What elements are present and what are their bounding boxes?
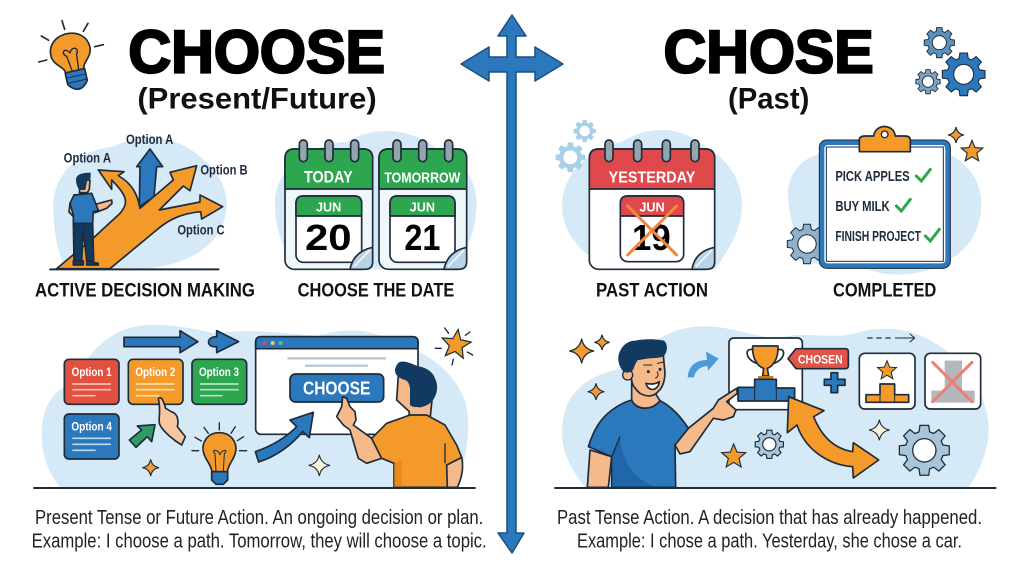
option cards: Option 1 bbox=[72, 365, 112, 379]
illustration: yesterday calendar: YESTERDAY bbox=[609, 170, 696, 187]
browser window: CHOOSE bbox=[303, 378, 370, 399]
curved arrow bbox=[688, 352, 719, 377]
hand pointing at option 2 bbox=[158, 398, 185, 445]
option labels: Option A bbox=[126, 132, 173, 147]
panel: chose top section bbox=[556, 19, 985, 302]
illustration: active decision making: Option A bbox=[64, 150, 111, 165]
large orange arrow bbox=[787, 397, 879, 478]
person pointing bbox=[587, 339, 737, 487]
calendar tomorrow bbox=[379, 140, 467, 269]
label: active decision making: ACTIVE DECISION MAKING bbox=[35, 281, 255, 302]
calendar tomorrow: 21 bbox=[404, 217, 440, 258]
star bbox=[435, 327, 473, 365]
calendar today: 20 bbox=[305, 217, 352, 258]
sparkles bbox=[569, 335, 610, 400]
panel: chose bottom illustration bbox=[554, 327, 996, 552]
dashed arrow bbox=[867, 336, 892, 340]
illustration: completed clipboard: FINISH PROJECT bbox=[835, 229, 921, 245]
chosen tag bbox=[788, 349, 848, 369]
top arrows bbox=[124, 331, 239, 353]
person clicking choose bbox=[337, 362, 463, 487]
calendar today: JUN bbox=[316, 201, 341, 215]
label: completed: COMPLETED bbox=[833, 281, 936, 302]
description: chose bbox=[557, 507, 982, 552]
rejected podium card bbox=[925, 353, 981, 409]
illustration: yesterday calendar bbox=[556, 120, 742, 269]
sparkles bbox=[142, 455, 330, 476]
label: past action: PAST ACTION bbox=[596, 281, 708, 302]
option cards bbox=[64, 359, 247, 459]
chosen tag: CHOSEN bbox=[798, 352, 843, 366]
illustration: yesterday calendar: 19 bbox=[632, 217, 671, 258]
calendar tomorrow: TOMORROW bbox=[384, 170, 461, 187]
illustration: active decision making: Option B bbox=[200, 163, 248, 178]
background blob bbox=[562, 327, 989, 487]
illustration: active decision making bbox=[49, 132, 248, 269]
illustration: yesterday calendar: JUN bbox=[639, 201, 665, 215]
option cards: Option 2 bbox=[135, 365, 175, 379]
subtitle: present/future: (Present/Future) bbox=[137, 82, 377, 115]
icon: gears bbox=[916, 28, 985, 96]
calendar today bbox=[285, 140, 373, 269]
illustration: calendars today and tomorrow bbox=[275, 131, 477, 269]
description: choose: Present Tense or Future Action. An ongoing decision or plan. bbox=[35, 507, 483, 529]
small sparkle, star and gears bbox=[722, 420, 949, 475]
star podium card bbox=[859, 353, 915, 409]
illustration: completed clipboard: BUY MILK bbox=[835, 199, 890, 215]
description: choose: Example: I choose a path. Tomorrow, they will choose a topic. bbox=[32, 530, 487, 552]
illustration: active decision making: Option C bbox=[177, 222, 225, 237]
option cards: Option 3 bbox=[199, 365, 239, 379]
option cards: Option 4 bbox=[71, 419, 112, 433]
calendar today: TODAY bbox=[304, 168, 353, 187]
arrow: central four-way divider bbox=[461, 15, 563, 553]
person bbox=[69, 173, 112, 265]
title: CHOSE: CHOSE bbox=[664, 19, 874, 86]
illustration: completed clipboard: PICK APPLES bbox=[835, 169, 910, 185]
subtitle: past: (Past) bbox=[728, 82, 809, 115]
description: choose bbox=[32, 507, 487, 552]
title: CHOOSE: CHOOSE bbox=[128, 19, 385, 86]
browser window bbox=[256, 337, 418, 434]
idea bulb bbox=[192, 423, 247, 484]
calendar tomorrow: JUN bbox=[410, 201, 435, 215]
panel: choose bottom illustration bbox=[32, 325, 487, 552]
illustration: completed clipboard bbox=[787, 126, 983, 275]
background blob bbox=[42, 325, 468, 487]
icon: light bulb bbox=[39, 21, 103, 94]
green arrow bbox=[129, 425, 155, 447]
plus icon bbox=[824, 373, 845, 393]
panel: choose top section bbox=[35, 19, 477, 302]
trophy card bbox=[729, 338, 802, 410]
blue arrow to button bbox=[255, 412, 313, 462]
label: choose the date: CHOOSE THE DATE bbox=[298, 281, 454, 302]
